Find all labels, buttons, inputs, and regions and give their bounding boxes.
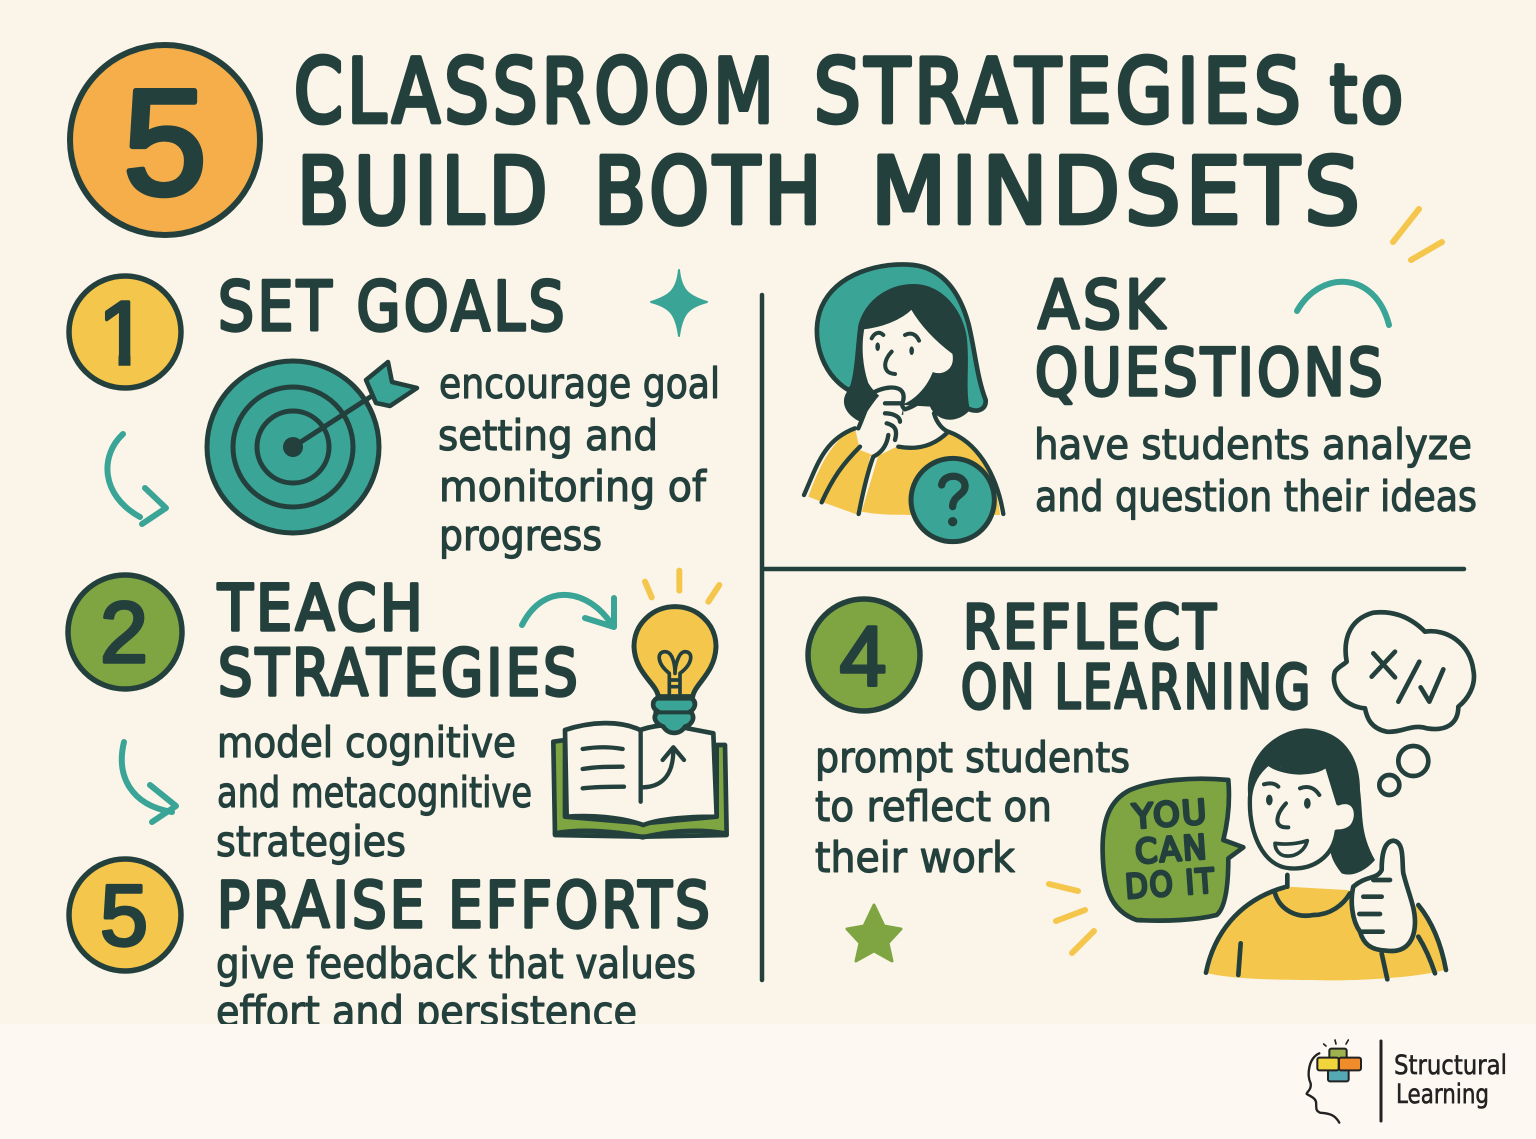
body text: reflect on learning: prompt students xyxy=(815,733,1130,782)
panel: teach strategies xyxy=(68,571,727,866)
body text: ask questions xyxy=(1034,420,1477,521)
title: to xyxy=(1330,48,1407,141)
curved arrow xyxy=(522,595,614,627)
title badge: number 5: 5 xyxy=(123,58,207,226)
speech bubble: you can do it: DO IT xyxy=(1124,861,1217,906)
body text: teach strategies: strategies xyxy=(216,817,406,866)
logo wordmark: Learning xyxy=(1396,1079,1489,1110)
body text: set goals xyxy=(438,359,720,560)
heading: reflect on learning: ON LEARNING xyxy=(961,652,1313,723)
body text: set goals: progress xyxy=(439,511,602,560)
number badge 5: 5 xyxy=(100,868,148,964)
hair and face xyxy=(1248,728,1375,875)
number badge 5 xyxy=(69,859,181,971)
speech bubble: you can do it xyxy=(1103,779,1243,921)
title: MINDSETS xyxy=(871,138,1365,245)
heading: ask questions: ASK xyxy=(1038,266,1168,344)
title xyxy=(294,40,1407,245)
number badge 1 xyxy=(69,276,181,388)
panel: reflect on learning xyxy=(808,592,1474,980)
panel divider lines xyxy=(762,295,1464,980)
shirt and body xyxy=(1206,875,1446,980)
panel: set goals xyxy=(69,268,720,560)
body text: reflect on learning: to reflect on xyxy=(815,782,1052,831)
body text: teach strategies: and metacognitive xyxy=(217,768,532,817)
heading: ask questions: QUESTIONS xyxy=(1035,336,1386,411)
number badge 4 xyxy=(808,599,920,711)
icon: green star xyxy=(847,905,901,961)
title: CLASSROOM xyxy=(294,40,778,143)
title: BUILD xyxy=(297,138,552,245)
heading: ask questions xyxy=(1035,266,1386,411)
curved arrow xyxy=(122,742,176,822)
icon: open book and light bulb xyxy=(553,571,727,837)
curved arrow xyxy=(107,434,166,524)
title: BOTH xyxy=(594,138,826,245)
footer band xyxy=(0,1024,1536,1139)
body text: set goals: monitoring of xyxy=(439,462,707,511)
icon: teal arc xyxy=(1297,282,1389,325)
heading: teach strategies: TEACH xyxy=(217,572,426,645)
heading: reflect on learning: REFLECT xyxy=(963,592,1219,663)
number badge 2 xyxy=(68,575,182,689)
title: STRATEGIES xyxy=(814,40,1305,143)
thought cloud xyxy=(1334,612,1474,732)
number badge 2: 2 xyxy=(100,585,148,681)
body text: teach strategies xyxy=(216,718,532,866)
speech bubble: you can do it: YOU xyxy=(1130,792,1210,836)
icon: head with coloured blocks xyxy=(1307,1040,1361,1123)
body text: ask questions: and question their ideas xyxy=(1035,472,1477,521)
heading: teach strategies: STRATEGIES xyxy=(218,637,581,711)
heading: praise efforts: PRAISE EFFORTS xyxy=(217,869,713,942)
icon: target with arrow xyxy=(207,361,417,533)
thumbs up hand xyxy=(1352,841,1415,951)
heading: teach strategies xyxy=(217,572,581,711)
title badge: number 5 xyxy=(70,45,260,235)
body text: teach strategies: model cognitive xyxy=(217,718,516,767)
speech bubble: you can do it: CAN xyxy=(1134,827,1210,871)
logo divider xyxy=(1380,1041,1382,1121)
panel: ask questions xyxy=(804,264,1477,542)
heading: reflect on learning xyxy=(961,592,1313,723)
logo wordmark xyxy=(1394,1050,1507,1110)
number badge 1: 1 xyxy=(98,284,148,384)
logo: structural learning xyxy=(1307,1040,1507,1123)
body text: praise efforts xyxy=(216,939,696,1036)
icon: yellow sparks xyxy=(1049,884,1094,953)
body text: praise efforts: effort and persistence xyxy=(216,987,637,1036)
number badge 4: 4 xyxy=(840,609,886,703)
body text: reflect on learning: their work xyxy=(815,833,1016,882)
illustration: student with thumbs up, thought cloud and speech bubble xyxy=(1103,612,1474,980)
body text: ask questions: have students analyze xyxy=(1034,420,1472,469)
illustration: thinking student xyxy=(804,264,1003,542)
body text: reflect on learning xyxy=(815,733,1130,882)
icon: teal sparkle xyxy=(651,270,707,336)
heading: set goals: SET GOALS xyxy=(218,268,568,347)
body text: set goals: encourage goal xyxy=(439,359,720,408)
decorative yellow sparks near title xyxy=(1393,209,1442,260)
body text: praise efforts: give feedback that values xyxy=(216,939,696,988)
body text: set goals: setting and xyxy=(438,411,658,460)
logo wordmark: Structural xyxy=(1394,1050,1507,1081)
panel: praise efforts xyxy=(69,859,713,1036)
